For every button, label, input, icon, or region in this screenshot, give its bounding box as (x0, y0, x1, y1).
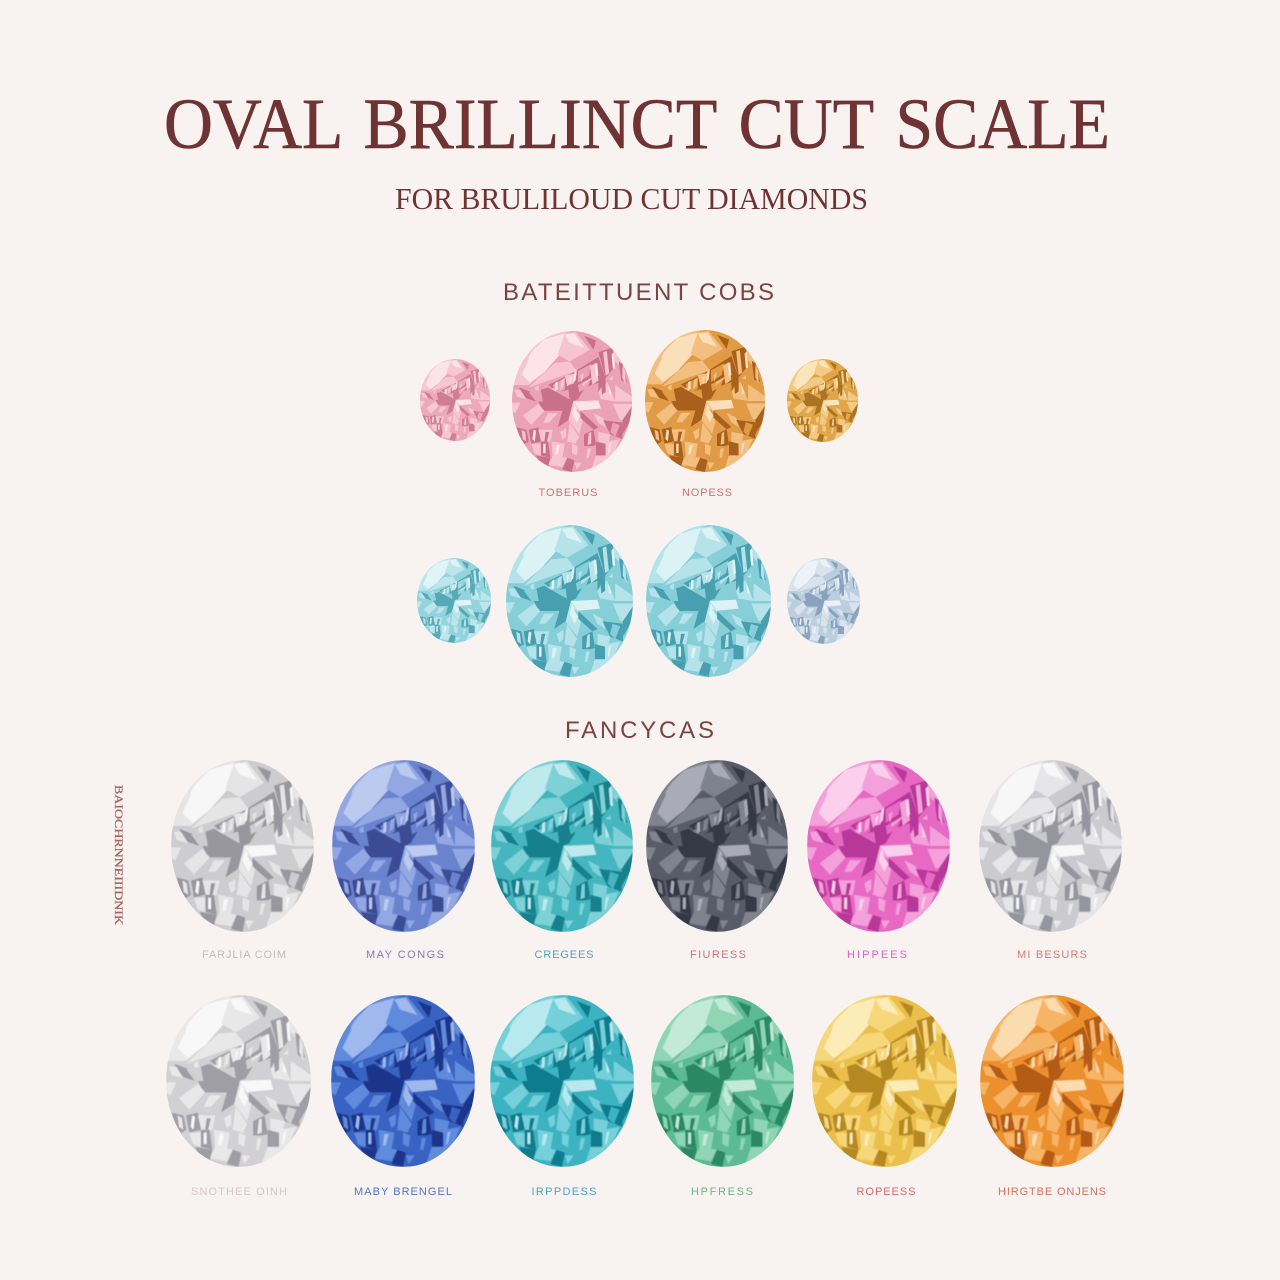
small pale blue gem (787, 558, 860, 644)
gem row: fancy colours two (166, 995, 1124, 1167)
teal gem (490, 995, 634, 1167)
labels: fancy row one: FIURESS (690, 949, 746, 961)
heading: top section: BATEITTUENT COBS (503, 279, 774, 306)
teal gem (491, 760, 633, 932)
labels: fancy row one (202, 949, 1087, 961)
small pink gem (420, 359, 490, 441)
large aqua gem left (506, 525, 633, 677)
large orange gem (645, 330, 765, 472)
yellow gem (812, 995, 957, 1167)
labels: fancy row two: ROPEESS (856, 1186, 916, 1198)
heading: fancy section: FANCYCAS (565, 717, 714, 744)
labels: fancy row two: MABY BRENGEL (354, 1186, 452, 1198)
labels: fancy row two: IRPPDESS (532, 1186, 596, 1198)
gem row: fancy colours one (171, 760, 1122, 932)
labels: fancy row one: MAY CONGS (366, 949, 444, 961)
periwinkle blue gem (332, 760, 475, 932)
green gem (651, 995, 794, 1167)
large pink gem (512, 331, 632, 472)
gem row: pink and orange (420, 330, 858, 472)
labels: fancy row two: SNOTHEE OINH (191, 1186, 287, 1198)
labels: fancy row two (191, 1186, 1106, 1198)
royal blue gem (331, 995, 475, 1167)
gem row: aqua (417, 525, 860, 677)
white gem right (979, 760, 1122, 932)
labels: pink and orange row: NOPESS (682, 487, 732, 499)
large aqua gem right (646, 525, 771, 677)
labels: fancy row two: HIRGTBE ONJENS (998, 1186, 1106, 1198)
title: OVAL BRILLINCT CUT SCALE (164, 84, 1110, 164)
labels: fancy row one: MI BESURS (1017, 949, 1087, 961)
orange gem (980, 995, 1124, 1167)
vertical side label: BAIOCHRNNEIIIDNIK (112, 785, 126, 925)
small aqua gem (417, 558, 491, 643)
small amber gem (787, 359, 858, 442)
labels: fancy row one: FARJLIA COIM (202, 949, 286, 961)
labels: pink and orange row: TOBERUS (538, 487, 598, 499)
magenta gem (807, 760, 950, 932)
charcoal gem (646, 760, 788, 932)
subtitle: FOR BRULILOUD CUT DIAMONDS (395, 181, 868, 216)
white gem (166, 995, 311, 1167)
labels: fancy row one: CREGEES (534, 949, 594, 961)
labels: fancy row two: HPFRESS (691, 1186, 753, 1198)
labels: fancy row one: HIPPEES (847, 949, 907, 961)
white gem (171, 760, 314, 932)
labels: pink and orange row (538, 487, 732, 499)
